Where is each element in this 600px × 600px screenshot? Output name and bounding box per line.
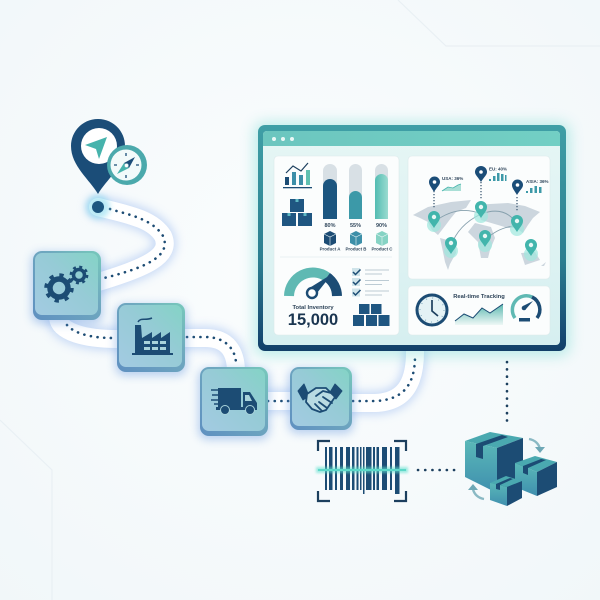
bar chart: product levels: 55% xyxy=(350,223,361,229)
checklist xyxy=(352,268,389,296)
region labels: ASIA: 36% xyxy=(526,179,549,184)
icon: box stack xyxy=(353,304,390,326)
step tile: gears xyxy=(31,251,103,324)
product labels: Product A xyxy=(320,246,341,252)
icon: product boxes xyxy=(324,231,388,246)
icon: gears xyxy=(46,267,87,301)
title bar xyxy=(263,131,560,146)
medium box xyxy=(515,456,557,496)
product labels: Product B xyxy=(346,246,366,252)
map pins: teal xyxy=(428,201,537,256)
icon: factory xyxy=(132,318,173,355)
bar chart: product levels: 90% xyxy=(376,223,387,229)
dotted connector: dashboard to boxes xyxy=(506,362,508,427)
step tile: truck xyxy=(198,367,270,440)
barcode scanner xyxy=(316,441,408,501)
icon: clock xyxy=(417,295,447,325)
barcode bars xyxy=(325,447,400,494)
bar chart: product levels: 80% xyxy=(324,223,336,229)
line chart xyxy=(455,304,503,325)
icon: stacked boxes xyxy=(282,199,312,226)
panel: world map xyxy=(408,156,550,279)
product labels xyxy=(320,246,393,252)
panel: real-time tracking xyxy=(408,286,550,335)
map pins: navy xyxy=(429,166,523,195)
total inventory text: 15,000 xyxy=(288,311,338,329)
icon: delivery truck xyxy=(211,388,257,414)
scan brackets xyxy=(318,441,406,501)
region labels xyxy=(442,166,549,184)
total inventory text: Total Inventory xyxy=(292,305,334,311)
mini charts xyxy=(442,173,542,193)
dotted pin stems xyxy=(434,182,517,212)
scan line xyxy=(316,467,408,473)
small box xyxy=(490,476,522,506)
route arcs xyxy=(434,210,517,246)
large box xyxy=(465,432,523,493)
region labels: EU: 40% xyxy=(489,166,507,172)
icon: handshake xyxy=(298,384,342,412)
start point xyxy=(86,195,110,219)
map pin halos xyxy=(427,209,538,261)
region labels: USA: 36% xyxy=(442,176,463,181)
step tile: factory xyxy=(115,303,187,376)
icon: speed gauge xyxy=(512,296,540,322)
bar chart: product levels xyxy=(323,164,388,229)
step tile: handshake xyxy=(288,367,354,434)
dotted connector: barcode to boxes xyxy=(418,469,456,471)
icon: location pin with compass xyxy=(71,119,147,194)
dashboard window xyxy=(254,122,570,356)
route path with glow xyxy=(58,207,415,403)
product labels: Product C xyxy=(372,246,393,252)
heading: real-time tracking: Real-time Tracking xyxy=(453,294,505,300)
cycle arrows xyxy=(473,439,540,499)
panel: products and inventory xyxy=(274,156,399,335)
icon: growth chart xyxy=(283,163,312,188)
gauge: total inventory xyxy=(289,272,337,298)
world map continents xyxy=(413,200,546,270)
icon: shipping boxes xyxy=(465,432,557,506)
